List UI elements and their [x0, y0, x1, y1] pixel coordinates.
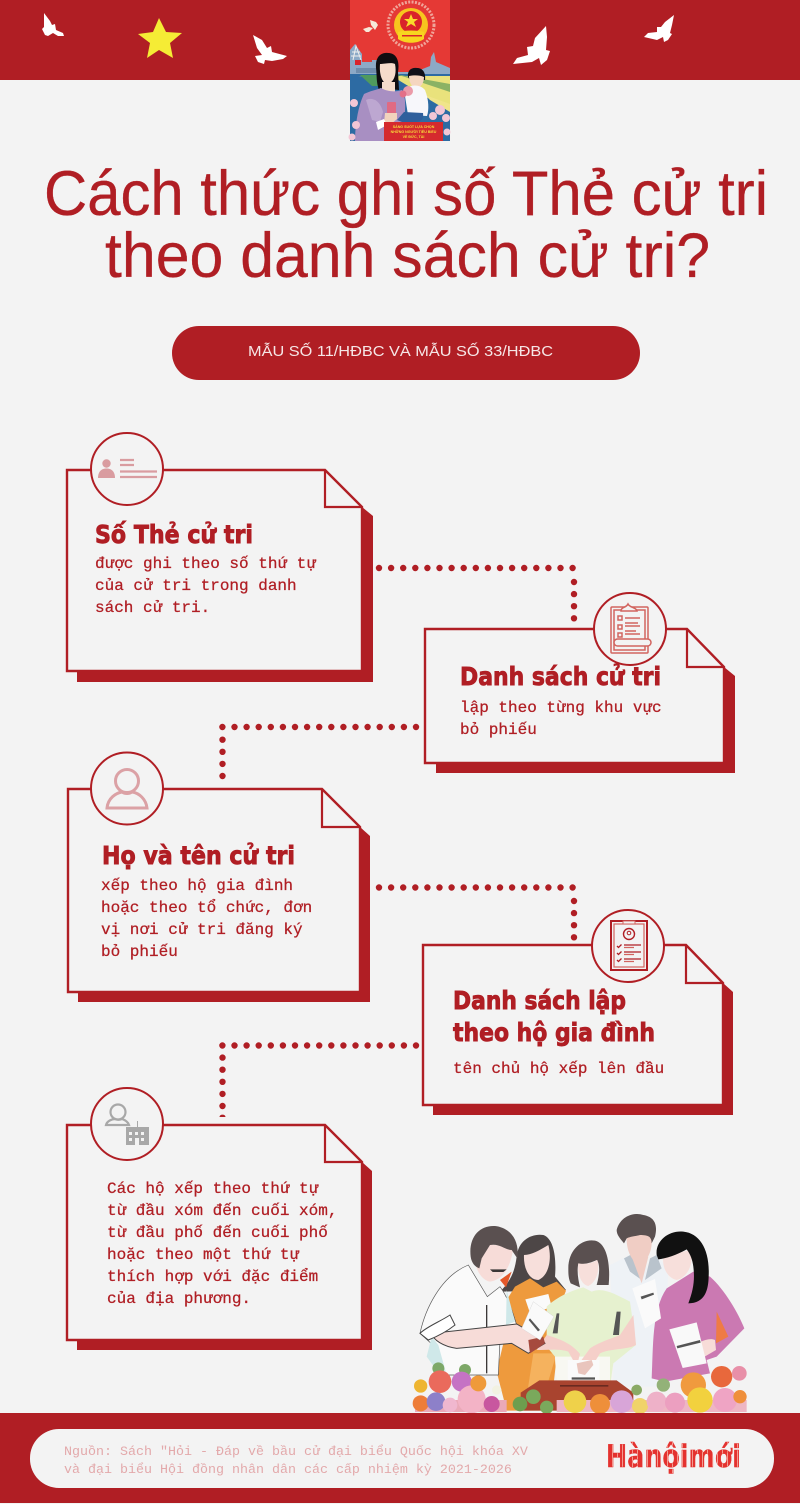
- dotted connectors: [220, 568, 574, 1117]
- icon: star: [138, 18, 182, 58]
- body text: [95, 555, 316, 617]
- icon: person and building: [91, 1088, 163, 1160]
- body text: từ đầu xóm đến cuối xóm,: [107, 1202, 337, 1220]
- slogan box: [384, 122, 443, 141]
- ballots: [522, 1279, 661, 1385]
- body text: của cử tri trong danh: [95, 577, 297, 595]
- body text: bỏ phiếu: [101, 943, 178, 961]
- icon: dove 3: [513, 26, 550, 65]
- lotus flowers: [348, 99, 450, 140]
- poster illustration: [348, 0, 450, 141]
- right woman: [652, 1231, 744, 1382]
- source text: và đại biểu Hội đồng nhân dân các cấp nhiệm kỳ 2021-2026: [64, 1462, 512, 1478]
- body text: vị nơi cử tri đăng ký: [101, 921, 303, 939]
- ballot box: [521, 1380, 633, 1411]
- body text: [107, 1180, 337, 1308]
- heading: Danh sách cử tri: [460, 662, 661, 691]
- panel: Danh sách cử tri: [425, 593, 735, 773]
- source panel: [30, 1429, 774, 1488]
- panel: Họ và tên cử tri: [68, 752, 370, 1002]
- body text: hoặc theo một thứ tự: [107, 1246, 299, 1264]
- body text: từ đầu phố đến cuối phố: [107, 1224, 328, 1242]
- body text: lập theo từng khu vực: [460, 699, 662, 717]
- icon: voter card: [91, 433, 163, 505]
- heading: Họ và tên cử tri: [102, 841, 295, 870]
- flowers: [413, 1362, 747, 1414]
- subtitle pill: MẪU SỐ 11/HĐBC VÀ MẪU SỐ 33/HĐBC: [248, 342, 553, 360]
- heading: [453, 986, 655, 1047]
- small doves: [363, 20, 378, 32]
- body text: thích hợp với đặc điểm: [107, 1267, 318, 1286]
- body text: [101, 877, 312, 961]
- skyline: [350, 44, 450, 76]
- header band: [0, 0, 800, 80]
- body text: xếp theo hộ gia đình: [101, 877, 293, 895]
- child: [397, 68, 428, 122]
- left man: [420, 1226, 545, 1375]
- body text: được ghi theo số thứ tự: [95, 555, 316, 573]
- icon: dove 1: [42, 13, 64, 36]
- icon: person: [91, 752, 163, 824]
- emblem: [388, 2, 434, 48]
- body text: Các hộ xếp theo thứ tự: [107, 1180, 319, 1198]
- source text: [64, 1444, 528, 1478]
- logo: Hànộimới: Hànộimới: [606, 1439, 741, 1475]
- icon: dove 4: [644, 15, 674, 42]
- body text: hoặc theo tổ chức, đơn: [101, 898, 312, 917]
- source text: Nguồn: Sách "Hỏi - Đáp về bầu cử đại biểu Quốc hội khóa XV: [64, 1444, 528, 1460]
- fields: [350, 74, 450, 141]
- icon: clipboard list: [594, 593, 666, 665]
- slogan box: VỀ ĐỨC, TÀI: [403, 134, 424, 139]
- heading: Danh sách lập: [453, 986, 626, 1015]
- panel: Số Thẻ cử tri: [67, 433, 373, 682]
- back man: [610, 1214, 668, 1387]
- body text: của địa phương.: [107, 1290, 251, 1308]
- footer band: [0, 1413, 800, 1503]
- orange woman: [497, 1235, 566, 1411]
- body text: sách cử tri.: [95, 599, 210, 617]
- panel: thứ tự các hộ: [67, 1088, 372, 1350]
- slogan box: NHỮNG NGƯỜI TIÊU BIỂU: [391, 129, 437, 134]
- body text: tên chủ hộ xếp lên đầu: [453, 1060, 664, 1078]
- slogan box: SÁNG SUỐT LỰA CHỌN: [393, 124, 435, 129]
- woman: [355, 53, 405, 141]
- subtitle pill: [172, 326, 640, 380]
- body text: bỏ phiếu: [460, 721, 537, 739]
- illustration: voters at ballot box: [413, 1214, 747, 1414]
- title: Cách thức ghi số Thẻ cử tri: [44, 159, 768, 229]
- center woman: [537, 1240, 636, 1387]
- title: theo danh sách cử tri?: [105, 221, 710, 291]
- heading: theo hộ gia đình: [453, 1018, 655, 1047]
- icon: dove 2: [253, 35, 287, 64]
- icon: profile clipboard: [592, 910, 664, 982]
- body text: [460, 699, 662, 739]
- heading: Số Thẻ cử tri: [95, 520, 253, 549]
- panel: Danh sách lập theo hộ gia đình: [423, 910, 733, 1115]
- title: [44, 159, 768, 291]
